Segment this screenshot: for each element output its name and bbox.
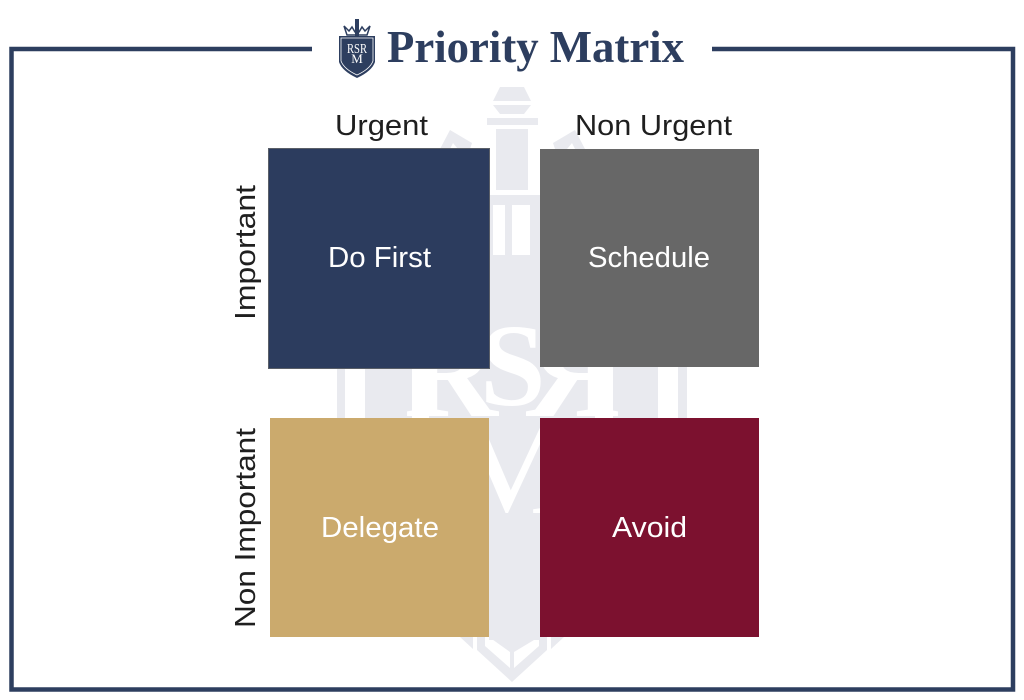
watermark: sword and shield crest: S (480, 300, 546, 431)
row label: Non Important: Non Important (230, 428, 262, 628)
watermark: sword and shield crest: R (404, 301, 500, 445)
panel: Avoid: Avoid (612, 512, 687, 544)
watermark: sword and shield crest (337, 87, 687, 682)
icon: RSM crest logo: RSR (347, 42, 367, 57)
column label: Non Urgent: Non Urgent (575, 110, 732, 142)
heading text: Priority Matrix (387, 21, 684, 72)
panel: Do First (268, 148, 490, 368)
panel: Avoid (540, 418, 759, 637)
panel: Delegate: Delegate (321, 512, 439, 544)
panel: Delegate (270, 418, 489, 637)
panel: Do First: Do First (328, 242, 431, 274)
icon: RSM crest logo: M (351, 51, 363, 66)
column label: Urgent: Urgent (335, 110, 428, 142)
row label: Important: Important (230, 185, 262, 320)
title (339, 19, 684, 78)
watermark: sword and shield crest: M (447, 385, 576, 545)
panel: Schedule: Schedule (588, 242, 710, 274)
watermark: sword and shield crest: R (525, 301, 621, 445)
icon: RSM crest logo (339, 19, 375, 78)
panel: Schedule (540, 149, 759, 367)
